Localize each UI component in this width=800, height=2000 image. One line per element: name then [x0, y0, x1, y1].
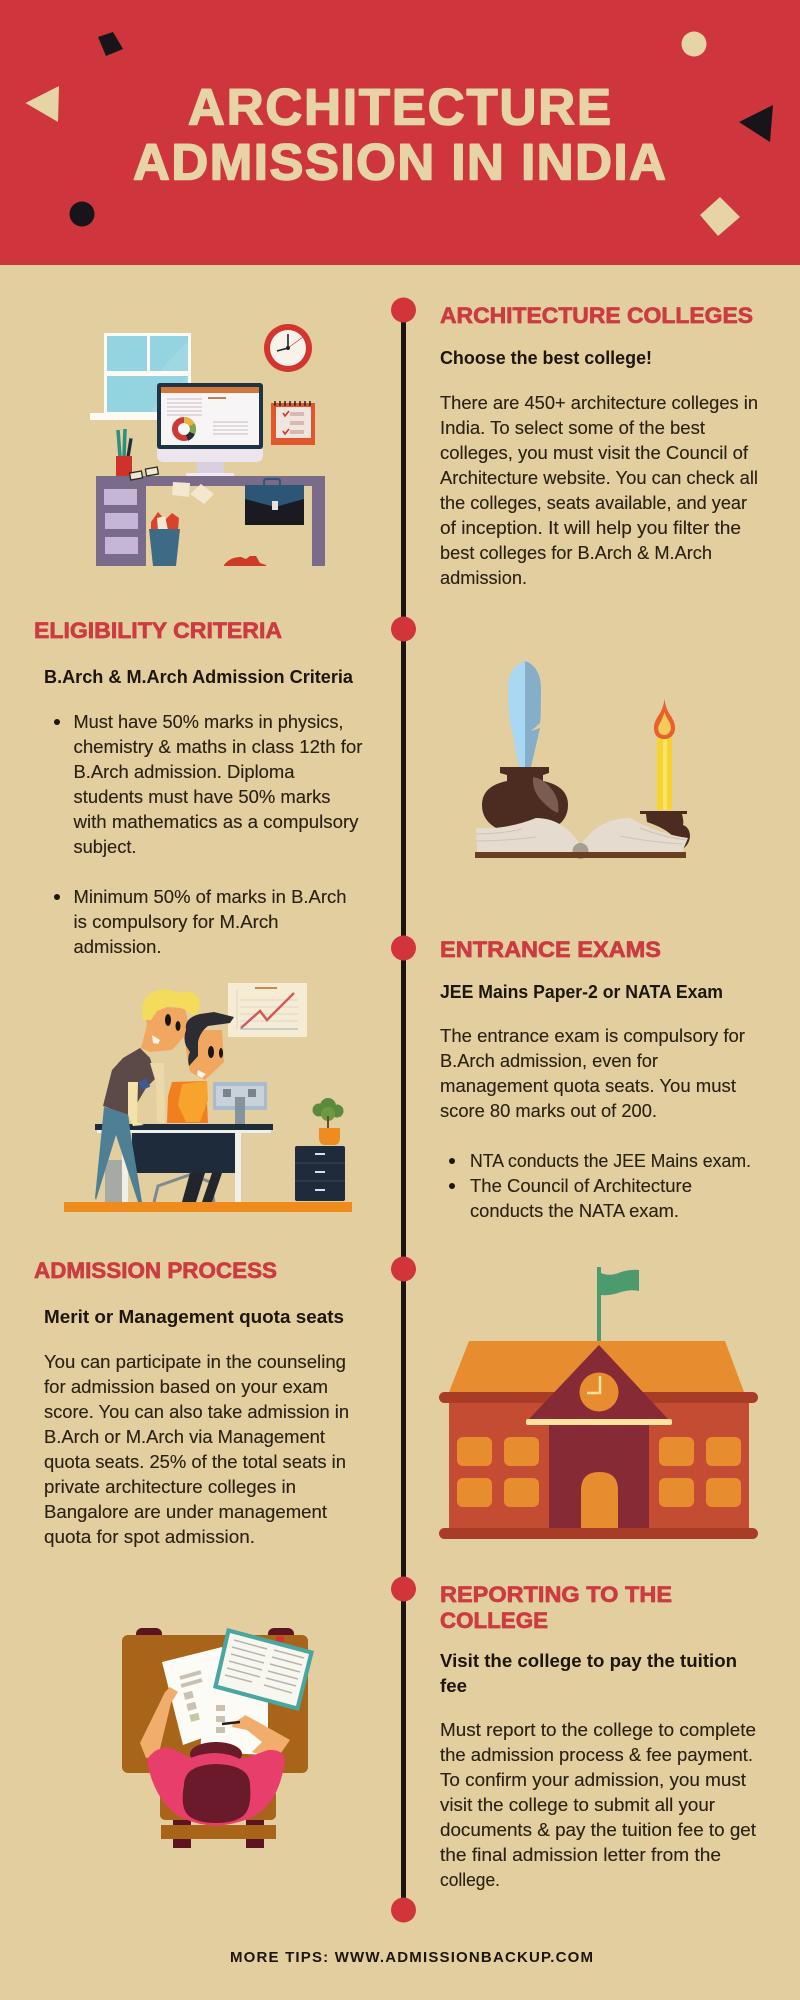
icon: cream diamond [700, 197, 740, 236]
body text: Bangalore are under management [44, 1501, 327, 1522]
timeline [391, 298, 416, 1922]
candle [654, 699, 675, 810]
subheading: Visit the college to pay the tuition [440, 1651, 737, 1671]
body text [440, 1025, 745, 1121]
body text: quota seats. 25% of the total seats in [44, 1451, 346, 1472]
body text: B.Arch admission, even for [440, 1050, 658, 1071]
subheading: fee [440, 1676, 467, 1696]
body text: Must report to the college to complete [440, 1719, 756, 1740]
title: ADMISSION IN INDIA [133, 134, 666, 190]
illustration: student writing at table [122, 1628, 314, 1848]
waste bin [149, 512, 180, 566]
ink pot [482, 767, 568, 829]
body text: To confirm your admission, you must [440, 1769, 746, 1790]
body text [440, 392, 758, 588]
body text: for admission based on your exam [44, 1376, 328, 1397]
illustration: college building [439, 1267, 758, 1539]
heading: ELIGIBILITY CRITERIA [34, 618, 282, 643]
subheading: Choose the best college! [440, 348, 652, 368]
computer tower [105, 1160, 122, 1202]
windows [457, 1437, 741, 1507]
base [439, 1528, 758, 1539]
body text: private architecture colleges in [44, 1476, 296, 1497]
body text: There are 450+ architecture colleges in [440, 392, 758, 413]
feather [508, 661, 541, 767]
chair [160, 1790, 276, 1848]
body text: the admission process & fee payment. [440, 1744, 753, 1765]
header banner [0, 0, 800, 265]
wall [449, 1400, 749, 1530]
bullet list: with mathematics as a compulsory [72, 811, 359, 832]
clock [264, 324, 312, 372]
calendar [271, 401, 315, 445]
heading [440, 1582, 672, 1633]
bullet list: admission. [74, 936, 162, 957]
bullet list: subject. [74, 836, 136, 857]
body text: score 80 marks out of 200. [440, 1100, 657, 1121]
body text: B.Arch or M.Arch via Management [44, 1426, 325, 1447]
heading: COLLEGE [440, 1608, 548, 1633]
seated person [167, 1012, 234, 1123]
flag [597, 1267, 639, 1347]
icon: black circle [70, 202, 94, 226]
illustration: quill, book and candle [475, 661, 690, 859]
body text: The entrance exam is compulsory for [440, 1025, 745, 1046]
body text [440, 1719, 756, 1890]
heading: ENTRANCE EXAMS [440, 937, 661, 962]
bullet list: students must have 50% marks [74, 786, 330, 807]
body text: of inception. It will help you filter the [440, 517, 741, 538]
central entrance [549, 1425, 649, 1529]
footer text: MORE TIPS: WWW.ADMISSIONBACKUP.COM [230, 1949, 593, 1966]
body text: college. [440, 1869, 500, 1890]
glasses [130, 467, 158, 480]
heading: REPORTING TO THE [440, 1582, 672, 1607]
illustration: office desk [90, 324, 325, 566]
pen [222, 1722, 240, 1724]
icon: cream circle [682, 32, 706, 56]
subheading: B.Arch & M.Arch Admission Criteria [44, 667, 354, 687]
standing person [95, 989, 200, 1202]
body text: best colleges for B.Arch & M.Arch [440, 542, 712, 563]
bullet list: conducts the NATA exam. [470, 1200, 679, 1221]
slippers [224, 556, 266, 566]
bullet list: The Council of Architecture [470, 1175, 692, 1196]
bullet list: is compulsory for M.Arch [74, 911, 278, 932]
body text: visit the college to submit all your [440, 1794, 715, 1815]
bullet list: Must have 50% marks in physics, [74, 711, 344, 732]
title: ARCHITECTURE [188, 78, 611, 136]
roof [449, 1341, 744, 1392]
open book [475, 818, 688, 859]
body text: admission. [440, 567, 527, 588]
body text: score. You can also take admission in [44, 1401, 349, 1422]
body text: the final admission letter from the [440, 1844, 721, 1865]
arms [140, 1687, 290, 1760]
floor [64, 1202, 352, 1212]
bullet list: NTA conducts the JEE Mains exam. [470, 1150, 751, 1171]
bullet list: Minimum 50% of marks in B.Arch [74, 886, 346, 907]
sticky notes [172, 482, 214, 504]
gable with clock [526, 1345, 672, 1425]
candle holder [640, 811, 690, 850]
body text: quota for spot admission. [44, 1526, 255, 1547]
title [133, 78, 666, 190]
table [122, 1628, 308, 1773]
panel: entrance exams [440, 937, 751, 1221]
monitor [157, 383, 263, 476]
cornice [439, 1392, 758, 1403]
subheading [440, 1651, 737, 1696]
student body [147, 1742, 285, 1826]
papers [162, 1647, 268, 1755]
potted plant [312, 1098, 344, 1145]
window [90, 333, 191, 420]
body text: Architecture website. You can check all [440, 467, 758, 488]
desk [96, 476, 325, 566]
icon: black triangle right [739, 105, 773, 142]
bullet list: chemistry & maths in class 12th for [74, 736, 362, 757]
pencil cup [116, 429, 132, 476]
panel: admission process [34, 1258, 349, 1547]
wall chart [228, 983, 307, 1037]
briefcase [245, 479, 304, 525]
body text: India. To select some of the best [440, 417, 705, 438]
body text: colleges, you must visit the Council of [440, 442, 749, 463]
body text: You can participate in the counseling [44, 1351, 346, 1372]
bullet list [449, 1150, 751, 1221]
icon: black square [98, 32, 123, 56]
body text [44, 1351, 349, 1547]
body text: management quota seats. You must [440, 1075, 736, 1096]
bullet list: B.Arch admission. Diploma [74, 761, 295, 782]
small monitor [213, 1082, 267, 1124]
desk [95, 1124, 273, 1202]
illustration: two people at a computer [64, 983, 352, 1212]
icon: cream triangle left [26, 86, 59, 122]
subheading: JEE Mains Paper-2 or NATA Exam [440, 982, 723, 1002]
panel: architecture colleges [440, 303, 758, 588]
subheading: Merit or Management quota seats [44, 1307, 344, 1327]
filing cabinet [295, 1146, 345, 1201]
open book [213, 1628, 314, 1711]
bullet list [54, 711, 362, 957]
panel: eligibility criteria [34, 618, 362, 957]
body text: documents & pay the tuition fee to get [440, 1819, 756, 1840]
heading: ADMISSION PROCESS [34, 1258, 277, 1283]
heading: ARCHITECTURE COLLEGES [440, 303, 753, 328]
body text: the colleges, seats available, and year [440, 492, 747, 513]
panel: reporting to the college [440, 1582, 756, 1890]
